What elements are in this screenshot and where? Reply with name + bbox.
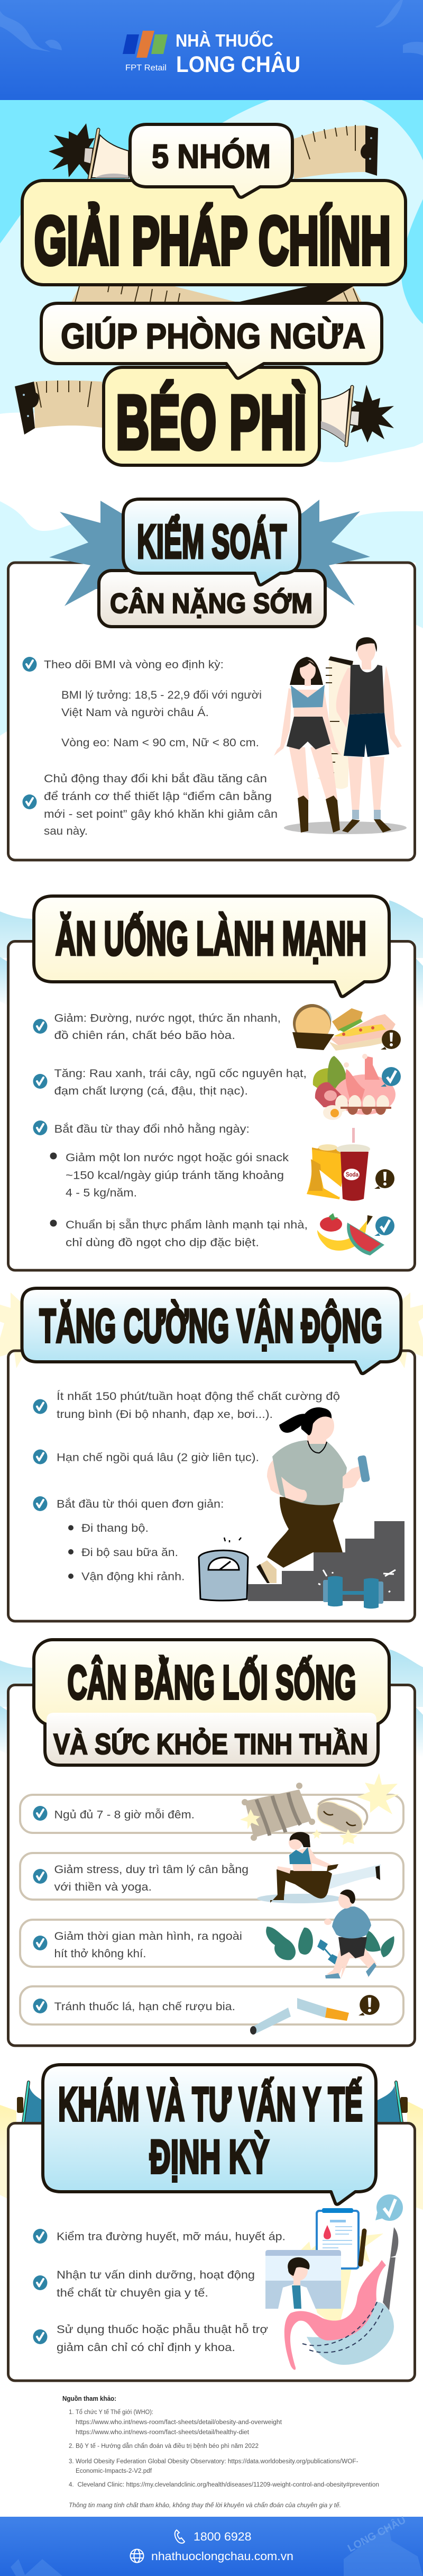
text: tang: Tăng: Rau xanh, trái cây, ngũ cốc nguyên hạt, [54, 1068, 307, 1080]
illustration: healthy protein [313, 1054, 401, 1120]
title: beo phi: BÉO PHÌ [116, 380, 307, 465]
illustration: chips and soda [307, 1128, 394, 1201]
text: han che ngoi: Hạn chế ngồi quá lâu (2 giờ liên tục). [57, 1452, 259, 1464]
header bar [0, 0, 423, 100]
references: https://www.who.int/news-room/fact-sheets/detail/obesity-and-overweight [76, 2419, 282, 2426]
row: tobacco [20, 1986, 403, 2024]
icon: tape measure middle [71, 286, 362, 302]
logo mark [123, 31, 168, 58]
panel: an uong lanh manh [8, 896, 415, 1270]
icon: megaphone left [17, 2082, 42, 2123]
title: 5 nhom [130, 124, 292, 197]
row: screen time [20, 1920, 403, 1967]
heading: kham va tu van y te dinh ky: ĐỊNH KỲ [150, 2130, 269, 2183]
logo text FPT Retail: FPT Retail [125, 64, 167, 73]
text: bat dau thoi quen: Bắt đầu từ thói quen đơn giản: [57, 1498, 224, 1511]
references: 4. [69, 2482, 74, 2488]
bullet list [68, 1522, 185, 1583]
row: sleep: Ngủ đủ 7 - 8 giờ mỗi đêm. [54, 1809, 195, 1821]
text: set point item: mới - set point” gây khó khăn khi giảm cân [44, 808, 278, 820]
starbursts behind heading [0, 1292, 423, 1368]
text: BMI item: Việt Nam và người châu Á. [61, 707, 209, 719]
references: Cleveland Clinic: https://my.clevelandclinic.org/health/diseases/11209-weight-control-and-obesity#prevention [77, 2482, 379, 2488]
bullet list: Đi thang bộ. [81, 1522, 149, 1534]
text: BMI item: Theo dõi BMI và vòng eo định kỳ: [44, 658, 224, 671]
heading: tang cuong van dong [22, 1288, 401, 1373]
row: tobacco: Tránh thuốc lá, hạn chế rượu bia. [54, 2001, 235, 2013]
bullet list: Đi bộ sau bữa ăn. [81, 1547, 178, 1559]
bullet item: chuan bi [50, 1219, 308, 1249]
text: BMI item: BMI lý tưởng: 18,5 - 22,9 đối với người [61, 689, 262, 701]
text: 150 phut [57, 1390, 340, 1421]
references: 2. [69, 2443, 74, 2450]
check icon [33, 1019, 48, 1034]
icon: megaphone top left [84, 130, 128, 179]
bullet item: chuan bi: Chuẩn bị sẵn thực phẩm lành mạnh tại nhà, [66, 1219, 308, 1231]
title: 5 nhom: 5 NHÓM [152, 138, 271, 175]
heading: an uong lanh manh [34, 896, 389, 997]
page background: top sky [0, 100, 423, 736]
heading: can nang som [99, 571, 325, 627]
text: nhan tu van [57, 2269, 255, 2299]
heading: va suc khoe tinh than: VÀ SỨC KHỎE TINH THẦN [53, 1728, 368, 1760]
row: stress: Giảm stress, duy trì tâm lý cân bằng [54, 1864, 249, 1876]
bullet item: chuan bi: chỉ dùng đồ ngọt cho dịp đặc biệt. [66, 1237, 259, 1249]
check icon [33, 2229, 48, 2244]
heading: kiem soat [123, 499, 300, 585]
references: Nguồn tham khảo: [62, 2394, 116, 2402]
icon: globe [130, 2549, 144, 2563]
clipboard [317, 2208, 358, 2268]
title: beo phi [104, 367, 319, 465]
background wave: section four [0, 1649, 423, 1757]
check icon [33, 1399, 48, 1414]
title: giup phong ngua: GIÚP PHÒNG NGỪA [61, 317, 365, 356]
watermark text: LONG CHÂU [345, 2513, 408, 2554]
check icon 1 [22, 657, 37, 672]
text: set point item: để tránh cơ thể thiết lập “điểm cân bằng [44, 791, 272, 803]
check icon [33, 2275, 48, 2290]
pen [361, 2231, 364, 2264]
text: giam: đồ chiên rán, chất béo bão hòa. [54, 1029, 235, 1042]
background wave: section two [0, 900, 423, 1008]
stomach [284, 2260, 386, 2370]
illustration: medical collage [265, 2194, 403, 2370]
text: su dung thuoc: giảm cân chỉ có chỉ định y khoa. [57, 2342, 235, 2354]
text: 150 phut: trung bình (Đi bộ nhanh, đạp xe, bơi...). [57, 1408, 273, 1421]
row: sleep [20, 1795, 403, 1833]
text: kiem tra: Kiểm tra đường huyết, mỡ máu, huyết áp. [57, 2231, 286, 2243]
text: nhan tu van: thể chất từ chuyên gia y tế. [57, 2287, 208, 2299]
doctor window [265, 2250, 341, 2309]
panel: tang cuong van dong [0, 1288, 423, 1621]
icon: tape measure top right [294, 125, 378, 179]
logo text Long Chau: LONG CHÂU [176, 51, 300, 77]
text: su dung thuoc [57, 2324, 268, 2354]
balloon [307, 2302, 394, 2365]
references: World Obesity Federation Global Obesity Observatory: https://data.worldobesity.org/publications/WOF- [76, 2459, 358, 2465]
check icon 2 [22, 794, 37, 809]
heading: can nang som: CÂN NẶNG SỚM [110, 587, 312, 619]
icon: megaphone bottom right [321, 385, 394, 445]
text: phone number: 1800 6928 [194, 2530, 252, 2543]
text: set point item [44, 773, 278, 837]
illustration: fast food [292, 1004, 401, 1051]
illustration: bathroom scale [199, 1538, 248, 1601]
panel: can bang loi song [8, 1640, 415, 2046]
illustration: dumbbell [318, 1570, 396, 1608]
references: Bộ Y tế - Hướng dẫn chẩn đoán và điều trị bệnh béo phì năm 2022 [76, 2443, 259, 2450]
illustration: man and woman with tape [274, 637, 407, 834]
text: website: nhathuoclongchau.com.vn [151, 2550, 293, 2563]
illustration: fruit [317, 1213, 394, 1255]
text: tang [54, 1068, 307, 1097]
text: su dung thuoc: Sử dụng thuốc hoặc phẫu thuật hỗ trợ [57, 2324, 268, 2336]
heading: va suc khoe tinh than [45, 1713, 378, 1765]
bullet list: Vận động khi rảnh. [81, 1571, 185, 1583]
references: Economic-Impacts-2-V2.pdf [76, 2468, 152, 2474]
bullet item: giam lon nuoc ngot [50, 1152, 289, 1199]
title decorations [15, 123, 394, 445]
panel: kham va tu van [8, 2065, 415, 2381]
illustration: broken cigarette [250, 1995, 380, 2035]
check icon [33, 1074, 48, 1089]
illustration: jogging woman [256, 1407, 370, 1583]
bullet item: giam lon nuoc ngot: 4 - 5 kg/năm. [66, 1187, 137, 1199]
starburst behind heading [49, 500, 370, 606]
text: set point item: Chủ động thay đổi khi bắt đầu tăng cân [44, 773, 267, 785]
heading: kham va tu van y te dinh ky [43, 2065, 376, 2204]
references: 3. [69, 2459, 74, 2465]
check icon [33, 1449, 48, 1464]
row: stress: với thiền và yoga. [54, 1881, 152, 1893]
row: screen time: hít thở không khí. [54, 1948, 146, 1960]
icon: burst top left [49, 123, 95, 177]
illustration: pillow and sleep mask [240, 1773, 399, 1845]
row: stress [20, 1853, 403, 1900]
check icon [33, 2329, 48, 2344]
title: giai phap chinh [22, 180, 406, 285]
check icon [33, 1120, 48, 1135]
check speech bubble [375, 2194, 403, 2221]
references: https://www.who.int/news-room/fact-sheets/detail/healthy-diet [76, 2429, 250, 2436]
icon: megaphone right [378, 2082, 408, 2123]
footer bar [0, 2513, 423, 2576]
man [336, 637, 402, 833]
illustration: plants and runner [266, 1890, 394, 1980]
logo text Nha Thuoc: NHÀ THUỐC [176, 30, 273, 50]
text: BMI item [44, 658, 262, 749]
scalpel [383, 2227, 398, 2310]
text: set point item: sau này. [44, 825, 88, 837]
references: Thông tin mang tính chất tham khảo, không thay thế lời khuyên và chẩn đoán của chuyên gia y tế. [69, 2502, 341, 2509]
text: giam [54, 1013, 281, 1042]
illustration: stairs [248, 1521, 404, 1601]
bullet item: giam lon nuoc ngot: Giảm một lon nước ngọt hoặc gói snack [66, 1152, 289, 1164]
illustration: yoga woman [257, 1832, 381, 1903]
references: 1. [69, 2409, 74, 2416]
row: screen time: Giảm thời gian màn hình, ra ngoài [54, 1930, 242, 1942]
text: tang: đạm chất lượng (cá, đậu, thịt nạc). [54, 1085, 248, 1097]
soda label: Soda [346, 1171, 358, 1178]
text: giam: Giảm: Đường, nước ngọt, thức ăn nhanh, [54, 1013, 281, 1025]
references: Tổ chức Y tế Thế giới (WHO): [76, 2409, 153, 2416]
heading: kiem soat: KIỂM SOÁT [137, 514, 287, 568]
text: 150 phut: Ít nhất 150 phút/tuần hoạt động thể chất cường độ [57, 1390, 340, 1403]
icon: phone [175, 2530, 185, 2543]
woman [274, 657, 342, 833]
bullet item: giam lon nuoc ngot: ~150 kcal/ngày giúp tránh tăng khoảng [66, 1170, 284, 1181]
title: giup phong ngua [41, 303, 382, 378]
text: nhan tu van: Nhận tư vấn dinh dưỡng, hoạt động [57, 2269, 255, 2281]
references [62, 2394, 379, 2509]
text: BMI item: Vòng eo: Nam < 90 cm, Nữ < 80 cm. [61, 737, 259, 749]
check icon [33, 1496, 48, 1511]
heading: can bang loi song [34, 1640, 389, 1725]
icon: tape measure bottom left [15, 381, 102, 435]
panel: kiem soat can nang som [8, 499, 415, 860]
background: yellow waves section five [0, 2101, 423, 2210]
text: bat dau: Bắt đầu từ thay đổi nhỏ hằng ngày: [54, 1123, 250, 1135]
